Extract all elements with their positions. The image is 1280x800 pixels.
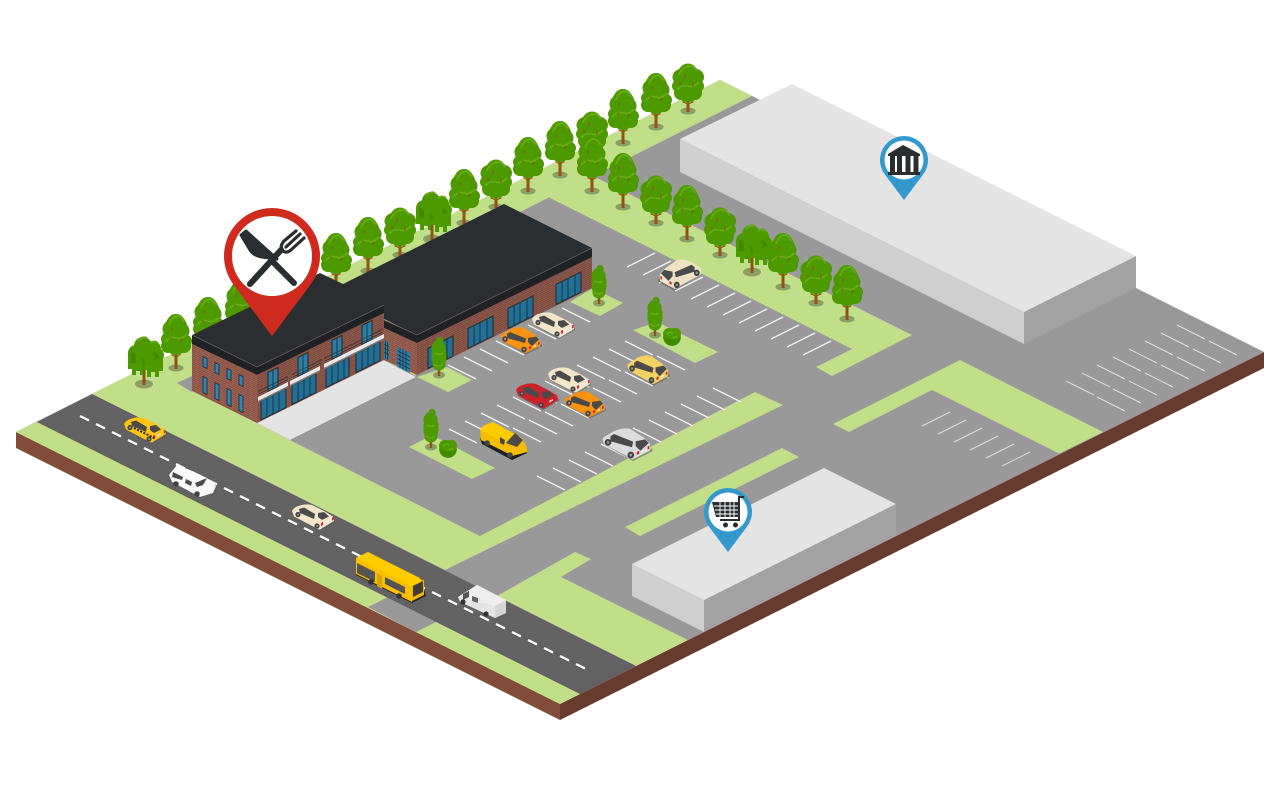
- long wing storefront windows: [428, 272, 581, 368]
- tree: [640, 176, 672, 226]
- tree: [353, 217, 384, 274]
- lawn L-shape east: [833, 360, 1103, 454]
- parking lines: [448, 253, 831, 490]
- tree: [800, 256, 832, 306]
- willow tree: [128, 337, 164, 388]
- small asphalt patch beside restaurant: [177, 376, 192, 392]
- yellow bus: [356, 552, 426, 603]
- lawn strip south of lot: [625, 448, 799, 536]
- white van: [458, 585, 506, 618]
- upper windows: [268, 320, 372, 392]
- map pin: bank: [880, 136, 928, 200]
- map pin: restaurant: [224, 208, 320, 336]
- east parking lines: [922, 325, 1237, 466]
- island by restaurant: [417, 367, 472, 392]
- white SUV: [169, 465, 216, 498]
- road vehicles: [124, 417, 506, 618]
- cypress tree: [648, 297, 662, 338]
- ground floor glazing: [261, 342, 380, 420]
- silver minivan: [602, 428, 652, 461]
- back tree row: [128, 64, 704, 388]
- tree: [513, 137, 544, 194]
- lawn: back strip, tree band and front verge: [92, 80, 912, 570]
- parked cars: [480, 259, 702, 461]
- parking lot surface: [290, 290, 700, 536]
- yellow hatchback: [627, 355, 670, 386]
- parking islands: [409, 288, 718, 479]
- tree: [384, 208, 416, 258]
- parking island planting: [424, 265, 681, 458]
- end wall: [1024, 256, 1136, 344]
- orange hatchback: [564, 391, 606, 418]
- wing return grid windows: [384, 340, 410, 373]
- tree: [321, 233, 352, 290]
- tree: [608, 153, 639, 210]
- front wall, upper wing: [257, 313, 384, 423]
- band tree row: [577, 137, 863, 322]
- tree: [193, 297, 224, 354]
- icon: fork: [250, 231, 304, 284]
- tree: [672, 185, 703, 242]
- front wall: [632, 564, 704, 632]
- front wall, long wing: [417, 257, 592, 375]
- beige sedan: [548, 367, 591, 394]
- tree: [704, 208, 736, 258]
- lawn south corner: [497, 552, 688, 666]
- wing return wall: [384, 328, 417, 375]
- cypress tree: [424, 409, 438, 450]
- roof: [632, 468, 896, 600]
- west wall windows: [203, 356, 243, 412]
- yellow van: [480, 422, 527, 460]
- west wall: [192, 344, 257, 423]
- tree: [449, 169, 480, 226]
- driveway gap across verge: [368, 595, 440, 632]
- beige minivan, mirrored: [658, 259, 702, 291]
- tree: [672, 64, 704, 114]
- orange hatchback: [500, 327, 542, 354]
- lawn strip south of road: [16, 422, 580, 704]
- icon: knife: [241, 231, 294, 283]
- tree: [768, 233, 799, 290]
- tree: [161, 314, 192, 372]
- tree: [832, 265, 863, 322]
- cypress tree: [592, 265, 606, 306]
- roof: [680, 84, 1136, 312]
- roof edge highlight: [192, 248, 592, 367]
- red hatchback: [516, 383, 559, 410]
- tree: [576, 112, 608, 162]
- tree: [480, 160, 512, 210]
- platform right side: [560, 352, 1264, 720]
- roof: [192, 204, 592, 367]
- large retail building: [680, 84, 1136, 344]
- awnings: [258, 334, 384, 401]
- restaurant building: [192, 204, 592, 423]
- beige sedan: [532, 312, 575, 339]
- balcony railings: [258, 330, 382, 394]
- willow tree: [736, 225, 772, 276]
- beige sedan: [292, 504, 335, 531]
- platform left side: [16, 432, 560, 720]
- concrete forecourt: [257, 360, 416, 440]
- mullions: [267, 320, 374, 417]
- small shop building: [632, 468, 896, 632]
- bush: [439, 440, 457, 458]
- tree: [608, 89, 639, 146]
- bush: [663, 328, 681, 346]
- island with bush, south: [409, 435, 495, 479]
- asphalt surface: [16, 80, 1264, 704]
- ground platform: [16, 80, 1264, 720]
- map pin: shopping: [704, 488, 752, 552]
- road centre dashes: [80, 416, 585, 668]
- front wall: [680, 139, 1024, 344]
- willow tree: [416, 192, 452, 244]
- icon: shopping cart: [712, 497, 744, 528]
- roof fascia: [192, 248, 592, 375]
- island with bush, centre: [633, 322, 718, 363]
- tree: [577, 137, 608, 194]
- tree: [225, 281, 256, 338]
- icon: bank building: [888, 145, 920, 175]
- tree: [641, 73, 672, 130]
- road: [37, 394, 636, 694]
- yellow taxi: [124, 417, 167, 444]
- cypress tree: [432, 337, 446, 378]
- tree: [545, 121, 576, 178]
- side wall: [704, 504, 896, 632]
- island by east wall: [570, 288, 623, 316]
- storefront upper wing: [258, 314, 384, 422]
